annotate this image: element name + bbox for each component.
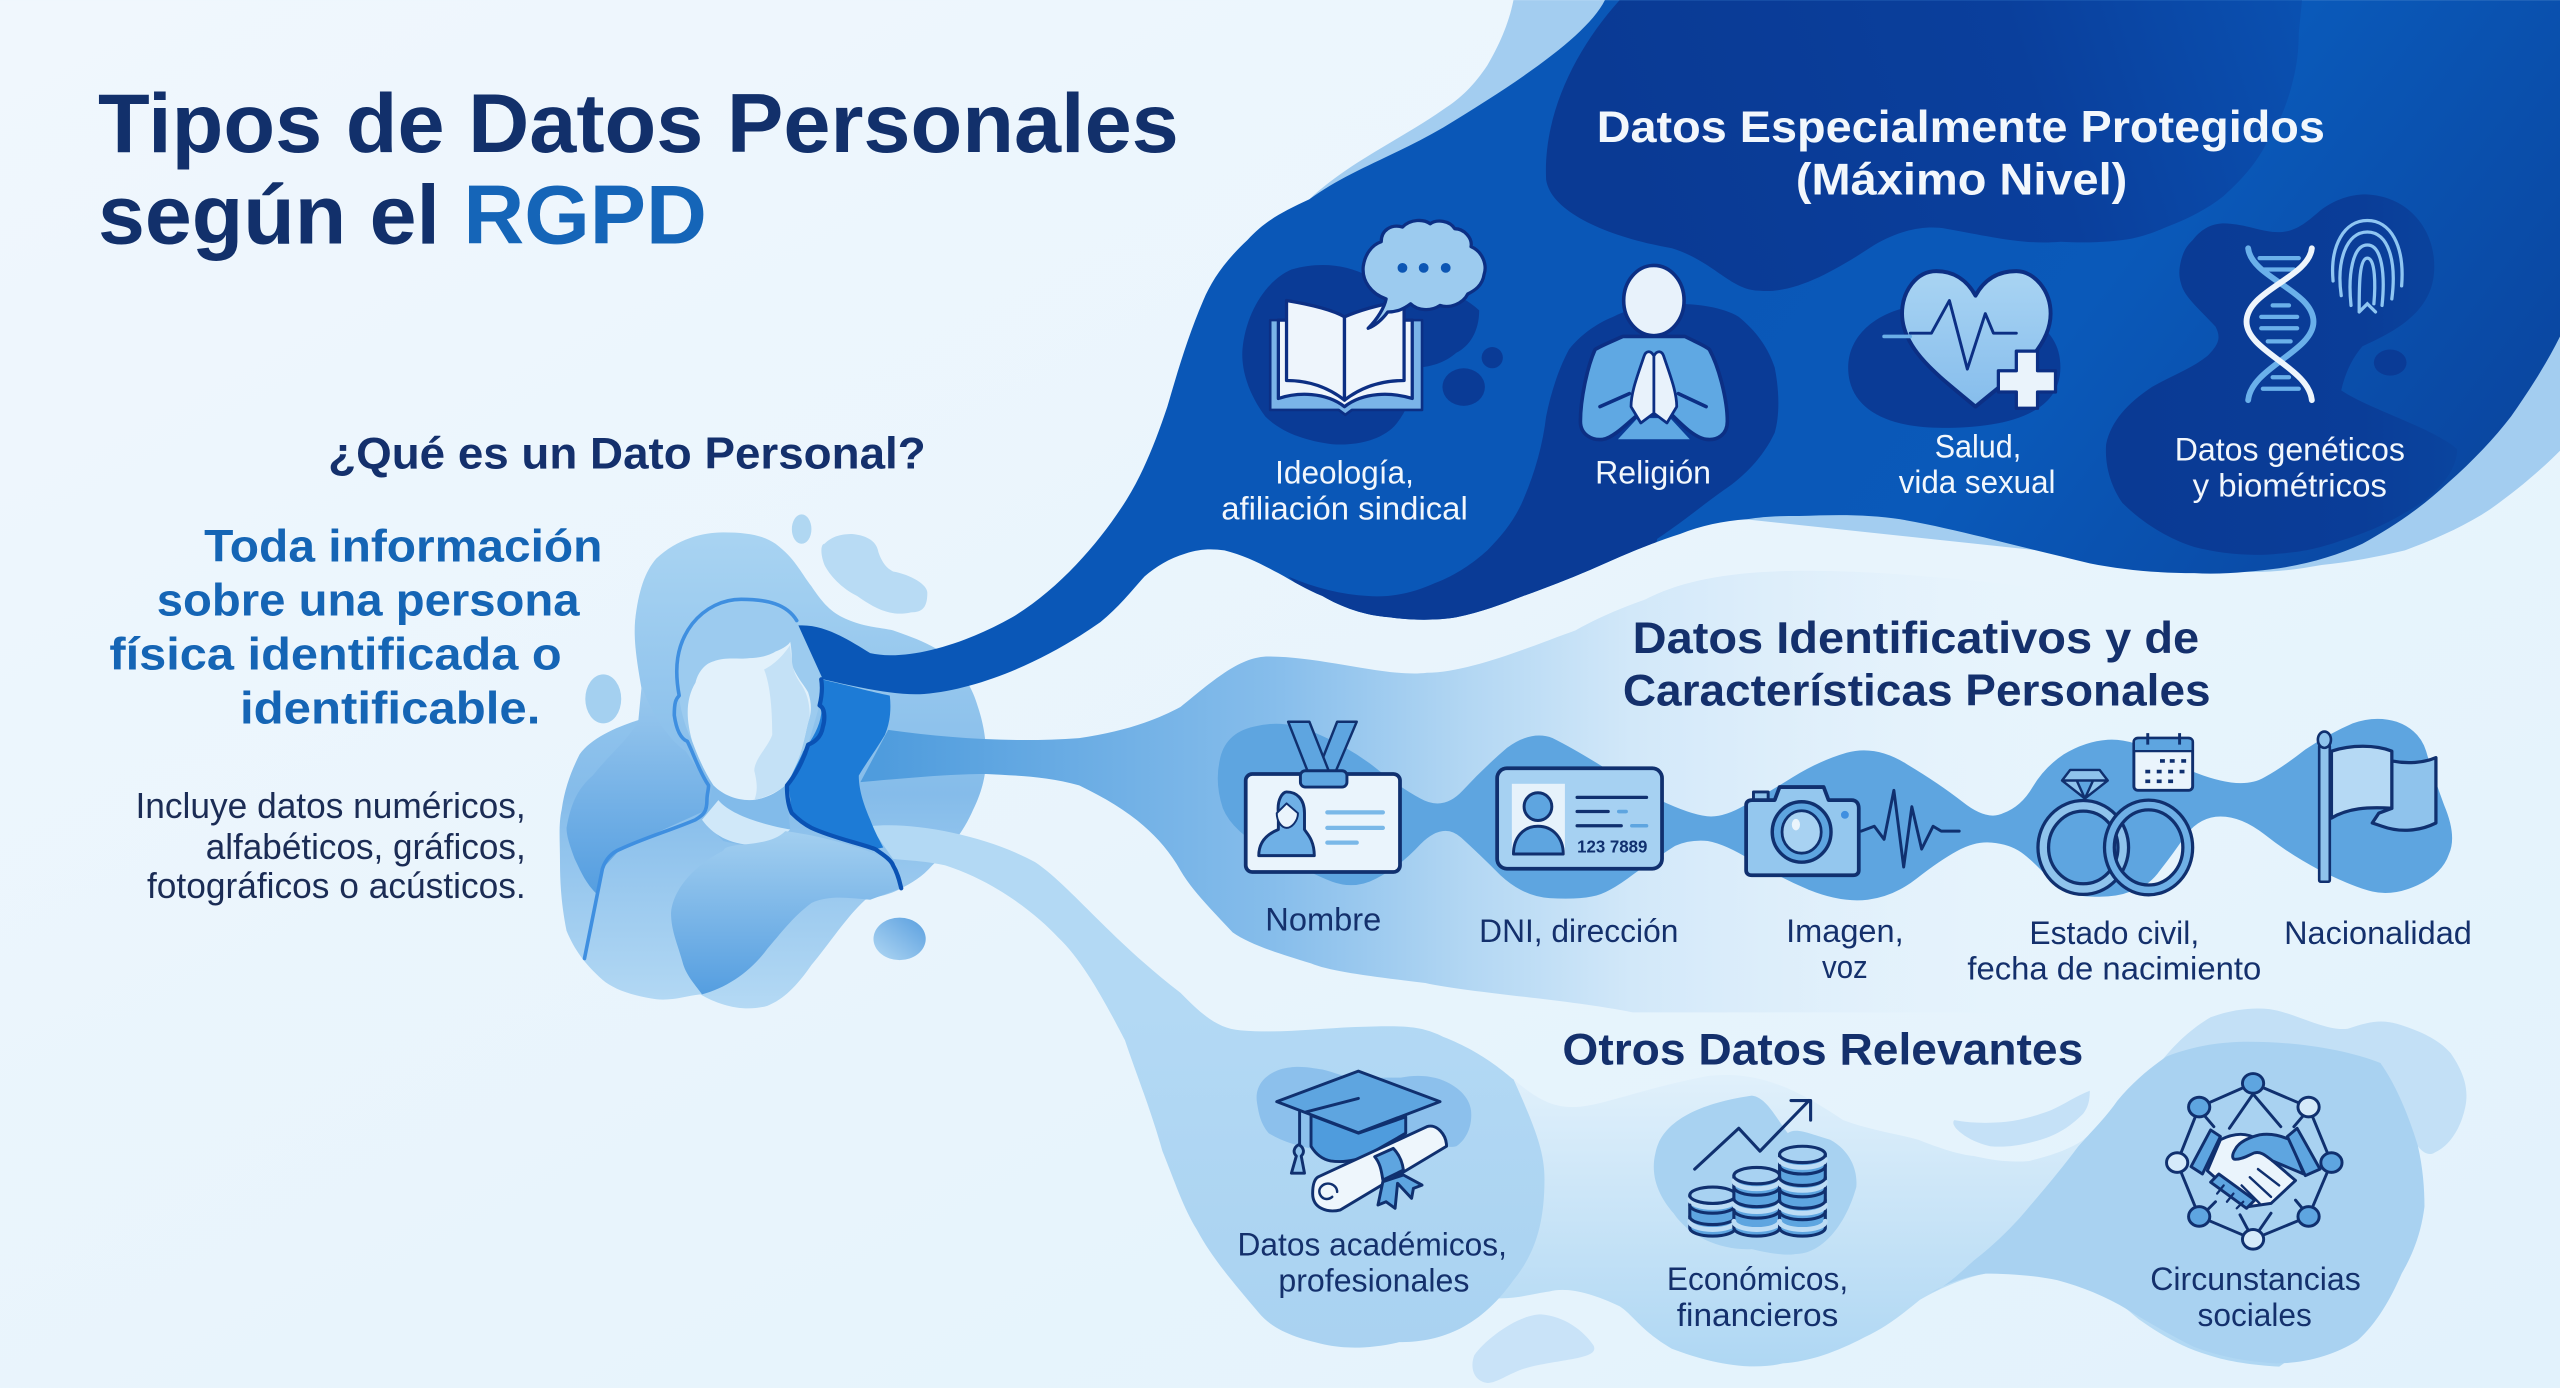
title: según el RGPD xyxy=(98,168,707,261)
definition text xyxy=(109,521,602,733)
icon: ID card xyxy=(1497,768,1662,869)
torso xyxy=(671,831,901,994)
panel: datos especialmente protegidos xyxy=(798,0,2560,694)
icon: book and speech bubble xyxy=(1270,220,1485,415)
icon: rings and calendar xyxy=(2043,733,2193,890)
small wave bottom xyxy=(1472,1314,1594,1383)
label: salud xyxy=(1899,427,2056,500)
blob: graduation cap xyxy=(1257,1067,1471,1154)
head and shoulders outline left xyxy=(584,599,797,958)
label: datos genéticos: y biométricos xyxy=(2193,466,2387,503)
title blob xyxy=(1546,0,2302,291)
label: datos académicos: Datos académicos, xyxy=(1238,1226,1507,1263)
label: dni: DNI, dirección xyxy=(1479,912,1678,949)
supporting text xyxy=(136,785,526,906)
label: circunstancias xyxy=(2150,1260,2361,1333)
decorative blob upper xyxy=(821,534,927,614)
label: datos genéticos: Datos genéticos xyxy=(2175,431,2405,468)
panel: datos identificativos band xyxy=(860,571,2452,1012)
label: ideología: afiliación sindical xyxy=(1221,489,1468,526)
supporting text: fotográficos o acústicos. xyxy=(147,865,526,906)
icon: camera and sound wave xyxy=(1746,787,1959,875)
definition text: identificable. xyxy=(240,682,540,733)
head and shoulders outline right xyxy=(787,679,901,888)
wavy ribbon xyxy=(1218,719,2452,900)
label: ideología: Ideología, xyxy=(1275,453,1414,490)
icon: heart with pulse xyxy=(1884,271,2056,408)
face shadow xyxy=(754,645,810,800)
genetic blob xyxy=(2106,194,2457,555)
blob: person back xyxy=(560,532,986,1008)
band background xyxy=(860,571,2057,1012)
definition text: Toda información xyxy=(204,521,602,572)
heading: otros datos relevantes: Otros Datos Relevantes xyxy=(1562,1026,2083,1075)
supporting text: alfabéticos, gráficos, xyxy=(206,826,526,867)
label: económicos xyxy=(1667,1260,1848,1333)
ideology blob xyxy=(1242,265,1479,445)
main ribbon shape xyxy=(798,0,2560,694)
right dark hair xyxy=(787,679,890,849)
small wave xyxy=(1953,1091,2090,1147)
label: imagen voz: voz xyxy=(1822,948,1868,985)
heading: datos identificativos: Características Personales xyxy=(1623,666,2211,715)
small dot top xyxy=(792,514,811,544)
icon: flag xyxy=(2318,732,2436,882)
label: salud: Salud, xyxy=(1935,427,2021,464)
label: salud: vida sexual xyxy=(1899,463,2056,500)
title: Tipos de Datos Personales xyxy=(98,77,1179,170)
hair and head area xyxy=(678,602,821,785)
title xyxy=(98,77,1179,261)
label: datos académicos: profesionales xyxy=(1278,1262,1469,1299)
icon: chart and coin stacks xyxy=(1690,1101,1825,1236)
label: económicos: Económicos, xyxy=(1667,1260,1848,1297)
label: ideología xyxy=(1221,453,1468,526)
icon: ID card: 123 7889 xyxy=(1577,836,1647,856)
pale lower band xyxy=(1469,1075,2318,1367)
face xyxy=(688,642,811,800)
label: imagen voz xyxy=(1786,912,1904,985)
label: estado civil xyxy=(1967,914,2261,987)
definition text: sobre una persona xyxy=(157,575,580,626)
icon: graduation cap and diploma xyxy=(1277,1071,1447,1211)
blob: económicos xyxy=(1654,1096,1857,1255)
icon: person silhouette xyxy=(567,599,901,994)
label: circunstancias: Circunstancias xyxy=(2150,1260,2361,1297)
label: religión: Religión xyxy=(1595,453,1711,490)
label: nombre: Nombre xyxy=(1265,901,1381,938)
label: estado civil: Estado civil, xyxy=(2029,914,2199,951)
heading: qué es un dato personal: ¿Qué es un Dato Personal? xyxy=(328,430,926,479)
heading: datos identificativos: Datos Identificativos y de xyxy=(1633,614,2199,663)
dots xyxy=(1482,347,1503,368)
definition text: física identificada o xyxy=(109,629,562,680)
icon: name badge xyxy=(1246,722,1400,872)
label: económicos: financieros xyxy=(1677,1296,1838,1333)
heading: datos identificativos xyxy=(1623,614,2211,715)
label: nacionalidad: Nacionalidad xyxy=(2284,914,2472,951)
label: estado civil: fecha de nacimiento xyxy=(1967,950,2261,987)
icon: DNA and fingerprint xyxy=(2247,221,2402,400)
navy shading xyxy=(1242,0,2457,653)
section heading: Datos Especialmente Protegidos xyxy=(1597,103,2325,152)
neck xyxy=(705,785,790,845)
label: datos genéticos xyxy=(2175,431,2405,503)
label: imagen voz: Imagen, xyxy=(1786,912,1904,949)
blob and ribbon: datos académicos xyxy=(870,825,1544,1348)
icon: praying person xyxy=(1580,265,1727,440)
label: circunstancias: sociales xyxy=(2198,1296,2312,1333)
icon: handshake network xyxy=(2167,1074,2342,1249)
panel: otros datos relevantes xyxy=(870,825,2466,1383)
small dot left xyxy=(585,674,621,723)
small dot lower xyxy=(873,918,926,960)
supporting text: Incluye datos numéricos, xyxy=(136,785,526,826)
pale upper right lobe xyxy=(2155,1009,2466,1176)
section heading xyxy=(1597,103,2325,204)
section heading: (Máximo Nivel) xyxy=(1796,155,2127,204)
religion and lower crescent xyxy=(1288,304,1778,653)
pale outer edge xyxy=(1290,0,2560,572)
label: datos académicos xyxy=(1238,1226,1507,1299)
health blob xyxy=(1848,305,2060,428)
blob: circunstancias xyxy=(1930,1042,2424,1363)
left shoulder shade xyxy=(567,686,709,893)
collar xyxy=(702,800,790,845)
